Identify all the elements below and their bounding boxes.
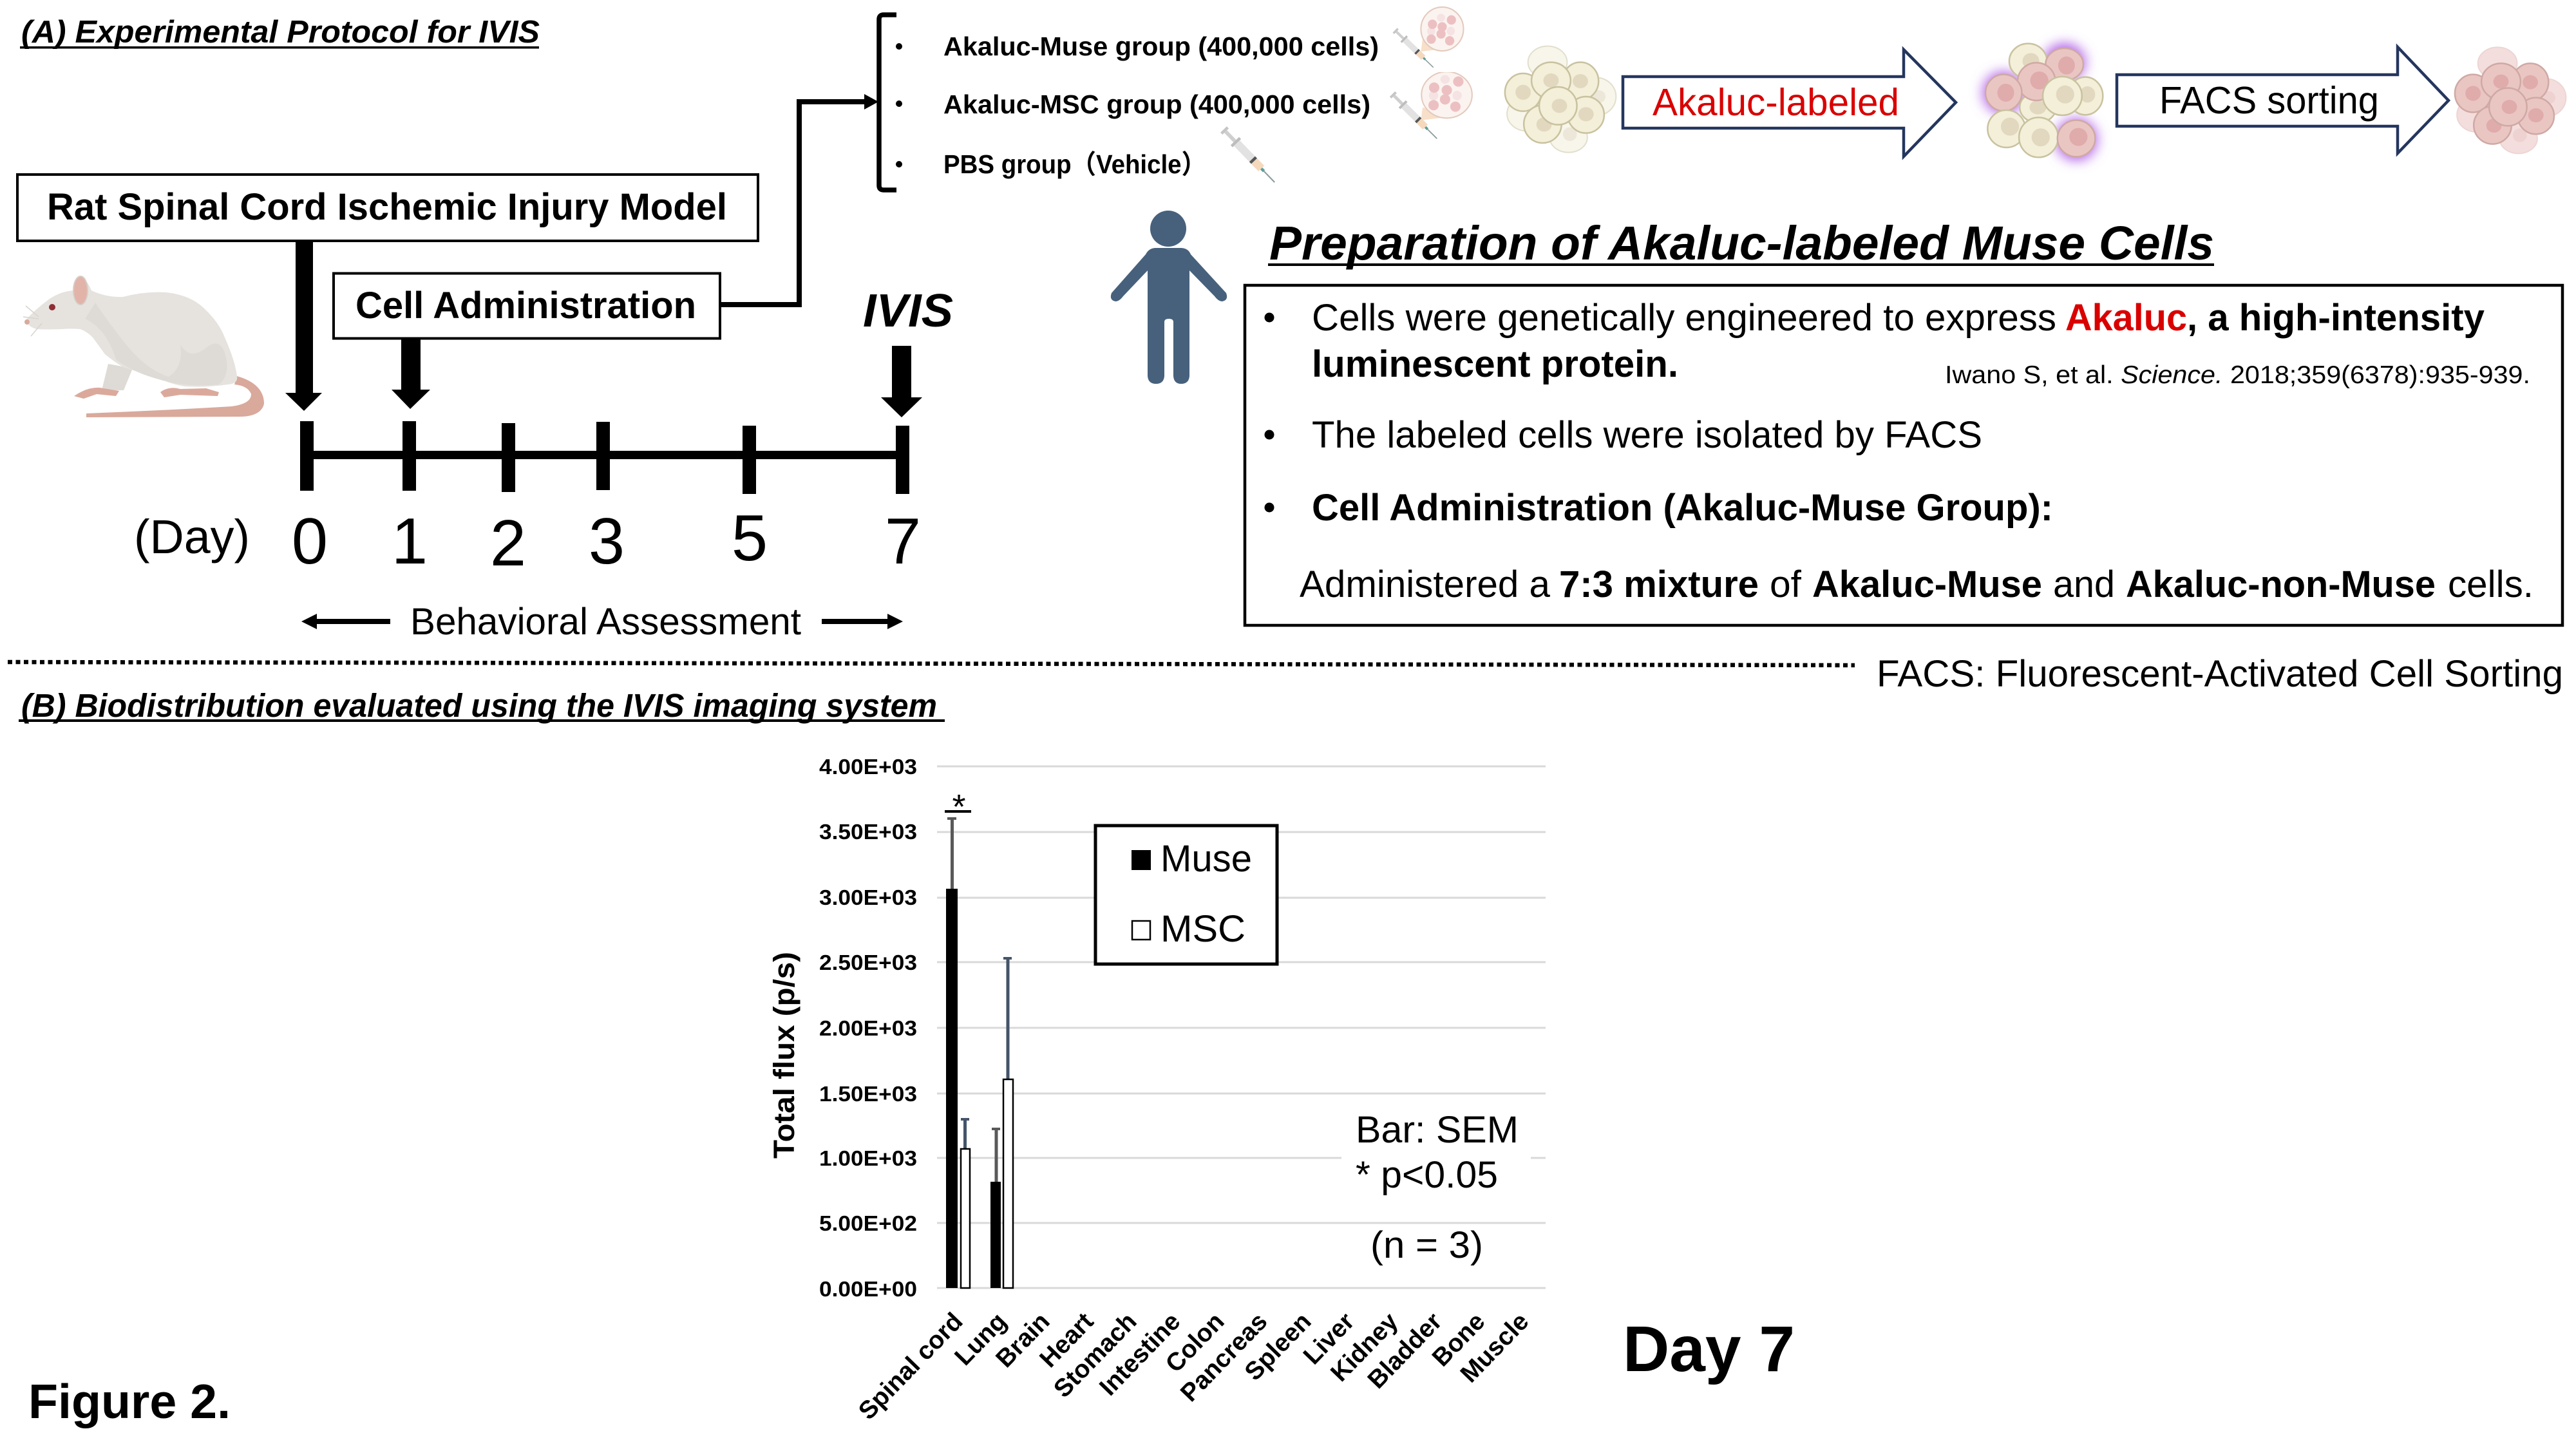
text: mixture line [1300,564,2533,605]
box: cell administration [334,273,720,339]
text: bullet 1 [1265,297,2485,385]
x axis labels: Kidney [1325,1307,1404,1387]
arrow: FACS sorting [2117,47,2448,153]
heading: section B title: (B) Biodistribution evaluated using the IVIS imaging system [21,687,937,724]
labels: days: 5 [732,502,768,574]
x axis labels: Stomach [1048,1307,1142,1403]
y axis tick labels: 1.00E+03 [819,1146,917,1170]
y axis tick labels: 2.00E+03 [819,1016,917,1040]
label: Day 7: Day 7 [1623,1313,1795,1385]
text: mixture line: Akaluc-non-Muse [2126,564,2436,605]
x axis labels: Colon [1160,1307,1229,1378]
y axis tick labels: 3.50E+03 [819,820,917,844]
labels: days: 1 [392,506,428,578]
x axis labels: Brain [990,1307,1055,1373]
text: mixture line: 7:3 mixture [1559,564,1759,605]
arrow: cell administration to day 1 [392,339,430,409]
legend: Muse [1160,838,1252,880]
y axis title: Total flux (p/s) [768,952,800,1159]
icon: rat [23,276,264,417]
labels: days: 0 [292,506,328,578]
y axis tick labels: 5.00E+02 [819,1211,917,1235]
label: behavioral assessment with arrows [301,601,903,643]
x axis labels: Lung [949,1307,1012,1371]
text: mixture line: Akaluc-Muse [1812,564,2042,605]
icon: MSC cell dish [1418,69,1475,120]
arrow: FACS sorting: FACS sorting [2159,79,2379,122]
label: IVIS: IVIS [863,285,953,337]
text: mixture line: of [1770,564,1802,605]
x axis labels: Spleen [1240,1307,1316,1386]
bars: lung [990,957,1013,1288]
legend [1095,826,1277,964]
y axis tick labels [819,755,917,1301]
text: bullet 1: luminescent protein. [1312,343,1678,385]
y axis tick labels: 1.50E+03 [819,1082,917,1106]
x axis labels: Bladder [1363,1307,1447,1394]
annotation: statistics: Bar: SEM [1356,1109,1519,1151]
list: treatment groups: Akaluc-Muse group (400,000 cells) [943,32,1379,61]
labels: days: 7 [885,506,921,578]
list: treatment groups [896,32,1379,179]
panel: preparation workflow [1111,43,2566,695]
icon: person [1111,211,1227,384]
bars: spinal cord [946,817,970,1288]
x axis labels: Muscle [1455,1307,1534,1388]
x axis labels: Pancreas [1175,1307,1273,1407]
panel: description box [1245,285,2562,625]
labels: days: 2 [490,507,526,580]
arrow: connector to groups [720,94,878,305]
y axis tick labels: 4.00E+03 [819,755,917,779]
arrow: model to day 0 [285,242,322,411]
text: mixture line: Administered a [1300,564,1551,605]
x axis labels: Intestine [1094,1307,1186,1401]
annotation: statistics: * p<0.05 [1356,1154,1498,1196]
arrow: Akaluc-labeled [1623,50,1956,156]
icon: Muse cell dish [1421,7,1463,52]
box: cell administration: Cell Administration [355,285,696,327]
arrow: IVIS to day 7 [881,346,922,417]
x axis labels: Bone [1427,1307,1490,1372]
legend: MSC [1160,908,1245,950]
text: bullet 3: Cell Administration (Akaluc-Muse Group): [1312,487,2053,529]
annotation: statistics [1356,1109,1519,1266]
text: bullet 1: Cells were genetically engineered to express [1312,297,2056,339]
timeline: day axis [300,421,909,494]
list: treatment groups: PBS group（Vehicle） [943,149,1206,179]
labels: days: (Day) [134,510,250,564]
significance marker [945,788,971,826]
list: treatment groups: Akaluc-MSC group (400,000 cells) [943,90,1370,119]
icon: sorted cell cluster [2455,47,2566,153]
significance marker: * [952,788,966,826]
bracket: treatment groups [879,15,896,190]
box: rat spinal cord model: Rat Spinal Cord Ischemic Injury Model [47,186,727,228]
labels: days: 3 [589,506,625,578]
label: behavioral assessment with arrows: Behavioral Assessment [410,601,801,643]
text: bullet 2: The labeled cells were isolated by FACS [1312,414,1982,456]
x axis labels: Heart [1034,1307,1099,1373]
annotation: statistics: (n = 3) [1370,1224,1483,1266]
heading: preparation title: Preparation of Akaluc-labeled Muse Cells [1269,216,2214,270]
label: Figure 2: Figure 2. [28,1374,231,1428]
y axis tick labels: 3.00E+03 [819,886,917,909]
panel A: experimental protocol [17,7,1475,643]
icon: unlabeled cell cluster [1505,46,1616,153]
y axis tick labels: 2.50E+03 [819,951,917,974]
gridlines [937,766,1546,1288]
text: bullet 1: , a high-intensity [2187,297,2485,339]
heading: section A title: (A) Experimental Protocol for IVIS [21,15,540,50]
arrow: Akaluc-labeled: Akaluc-labeled [1653,81,1899,124]
bar chart: biodistribution [768,755,1546,1425]
text: bullet 1: Akaluc [2065,297,2187,339]
text: mixture line: and [2053,564,2115,605]
x axis labels: Liver [1298,1307,1359,1370]
text: citation: Iwano S, et al. Science. 2018;359(6378):935-939. [1945,361,2530,389]
x axis labels [853,1307,1534,1425]
footnote: FACS abbreviation: FACS: Fluorescent-Activated Cell Sorting [1877,653,2563,695]
y axis tick labels: 0.00E+00 [819,1277,917,1301]
icon: syringe PBS [1219,126,1279,186]
x axis labels: Spinal cord [853,1307,968,1425]
icon: syringe MSC [1388,90,1441,142]
text: mixture line: cells. [2448,564,2533,605]
icon: labeled cell cluster with glow [1983,43,2103,161]
box: rat spinal cord model [17,175,758,241]
labels: days [134,502,921,580]
icon: syringe Muse [1392,27,1436,70]
